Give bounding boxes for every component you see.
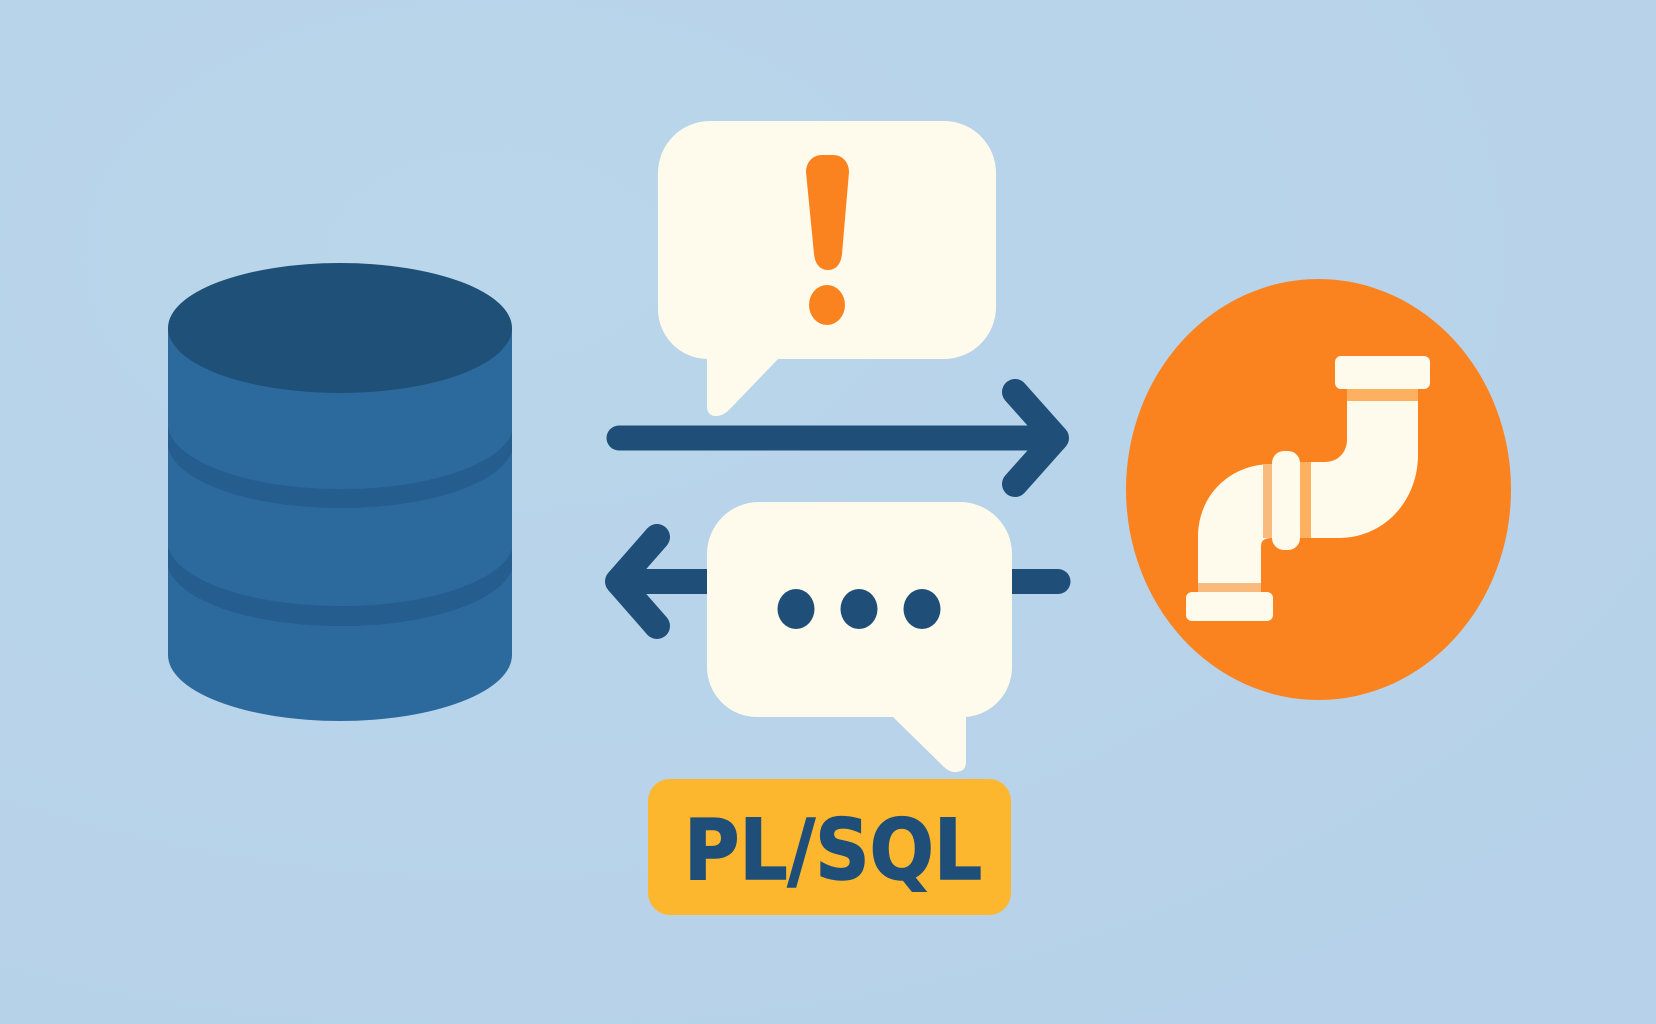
speech bubble: warning [658,121,996,416]
pipe: lower flange [1186,592,1273,621]
pipe bands [1198,389,1418,593]
icon: database cylinder [168,263,512,721]
database band: upper [168,427,512,508]
database top ellipse [168,263,512,393]
pipe: lower elbow [1198,464,1272,593]
icon: pipe in orange circle [1126,279,1511,700]
icon: three dots [778,589,940,629]
pipe: upper flange [1335,356,1430,389]
database band: lower [168,547,512,626]
speech bubble: typing [707,502,1012,772]
icon: exclamation mark [806,155,849,325]
arrow: pipe to database [618,537,1058,626]
label: PL/SQL [648,779,1011,915]
pipe: centre coupling [1272,451,1300,550]
arrow: database to pipe [619,392,1056,484]
pipe: upper elbow [1300,389,1418,538]
label: PL/SQL: PL/SQL [684,801,982,899]
